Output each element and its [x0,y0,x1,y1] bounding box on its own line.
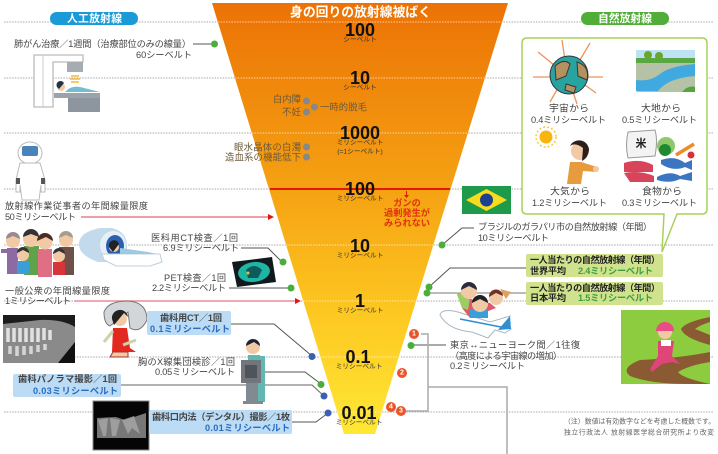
flight label [408,339,580,371]
caption: atmosphere [532,184,607,208]
footnote [564,416,715,436]
chest X-ray label [138,356,324,388]
PET exam label [152,272,294,293]
callout: cancer not observed: ガンの [393,197,421,208]
flight label: 0.2ミリシーベルト [450,361,525,371]
Japan average box: 日本平均 [530,292,566,303]
funnel title: 身の回りの放射線被ばく [290,4,431,20]
scale values [336,20,383,426]
dental CT label: 0.1ミリシーベルト [150,324,230,334]
Japan average box: 一人当たりの自然放射線（年間） [530,282,660,293]
panoramic label: 歯科パノラマ撮影／1回 [18,373,117,384]
icon: runner on path [621,310,710,384]
health effects in funnel: 不妊 [282,106,302,118]
Brazil natural radiation label [438,221,652,248]
scale values: 1000 [340,123,380,143]
intraoral dental label: 歯科口内法（デンタル）撮影／1枚 [152,411,290,422]
world average box: 一人当たりの自然放射線（年間） [530,254,660,265]
panoramic label [13,373,328,400]
icon: dental X-ray film [93,401,149,450]
scale values: 0.1 [345,347,371,367]
icon: radiotherapy machine [34,55,100,112]
Brazil natural radiation label: 10ミリシーベルト [478,233,549,243]
CT exam label: 医科用CT検査／1回 [151,232,238,243]
callout: cancer not observed [384,197,430,228]
health effects in funnel [225,94,367,162]
flight label: 東京↔ニューヨーク間／1往復 [450,339,580,350]
icon: family on airplane [440,282,511,338]
icon: protective suit worker [16,142,45,200]
caption: cosmic: 0.4ミリシーベルト [531,115,606,125]
scale values: 100 [345,20,375,40]
caption: ground: 大地から [641,102,681,114]
callout: cancer not observed: みられない [384,218,430,228]
world average box [426,254,663,290]
Brazil natural radiation label: ブラジルのガラパリ市の自然放射線（年間） [478,221,652,232]
worker dose limit: 50ミリシーベルト [5,212,76,222]
caption: food [622,184,697,208]
caption: ground [622,102,697,125]
panel: natural radiation sources [522,38,707,252]
health effects in funnel: 一時的脱毛 [320,102,367,112]
caption: ground: 0.5ミリシーベルト [622,115,697,125]
icon: food [624,130,694,182]
numbered markers and connector lines: 1 [412,330,416,338]
caption: atmosphere: 大気から [550,184,590,198]
CT exam label [151,232,286,266]
dental CT label: 歯科用CT／1回 [160,312,222,323]
intraoral dental label [149,410,332,434]
scale values: ミリシーベルト [337,138,383,146]
scale values: ミリシーベルト [337,306,383,314]
icon: dental panoramic X-ray [3,315,75,363]
public dose limit: 1ミリシーベルト [5,296,71,306]
scale values: ミリシーベルト [336,418,382,426]
world average box: 2.4ミリシーベルト [578,266,653,276]
callout: cancer not observed: 過剰発生が [384,207,430,218]
lung cancer treatment label: 肺がん治療／1週間（治療部位のみの線量） [14,38,191,49]
red threshold line 100 mSv: 100 [345,179,375,199]
lung cancer treatment label [14,38,218,60]
scale values: 10 [350,68,370,88]
caption: cosmic: 宇宙から [549,102,589,114]
health effects in funnel: 白内障 [273,94,301,104]
health effects in funnel: 造血系の機能低下 [225,152,301,162]
chest X-ray label: 0.05ミリシーベルト [155,367,235,377]
world average box: 世界平均 [530,265,566,276]
heading: natural radiation: 自然放射線 [598,11,652,25]
chest X-ray label: 胸のX線集団検診／1回 [138,356,235,367]
icon: family [1,229,74,277]
public dose limit: 一般公衆の年間線量限度 [5,285,110,296]
scale values: シーベルト [343,84,377,92]
icon: river landscape [636,50,695,92]
numbered markers and connector lines: 4 [389,404,393,410]
heading: artificial radiation [50,11,138,25]
icon: food: 米 [636,136,646,150]
footnote: （注）数値は有効数字などを考慮した概数です。 [564,416,715,426]
Japan average box [424,282,663,305]
worker dose limit [5,200,274,222]
caption: atmosphere: 1.2ミリシーベルト [532,198,607,208]
worker dose limit: 放射線作業従事者の年間線量限度 [5,200,148,211]
red threshold line 100 mSv [270,179,450,199]
public dose limit [5,285,301,306]
health effects in funnel: 眼水晶体の白濁 [234,142,301,152]
icon: man with X-ray panel [241,339,265,404]
caption: cosmic [531,102,606,125]
heading: natural radiation [581,11,669,25]
lung cancer treatment label: 60シーベルト [136,50,192,60]
scale values: ミリシーベルト [337,194,383,202]
footnote: 独立行政法人 放射線医学総合研究所より改変 [564,428,714,436]
dental CT label [147,311,316,360]
scale values: 0.01 [341,403,377,423]
caption: food: 0.3ミリシーベルト [622,198,697,208]
scale values: シーベルト [343,36,377,44]
scale values: ミリシーベルト [337,252,383,260]
intraoral dental label: 0.01ミリシーベルト [205,423,290,433]
icon: PET image [232,257,276,287]
scale values: 1 [355,291,365,311]
numbered markers and connector lines [386,329,507,454]
Japan average box: 1.5ミリシーベルト [578,293,653,303]
scale values: ミリシーベルト [336,362,382,370]
icon: Brazil flag [462,186,511,214]
icon: patient in dental CT [104,301,147,357]
PET exam label: PET検査／1回 [164,272,226,283]
scale values: (=1シーベルト) [337,148,383,156]
numbered markers and connector lines: 2 [400,370,404,376]
icon: earth with rays [533,40,603,104]
heading: artificial radiation: 人工放射線 [67,11,122,25]
flight label: （高度による宇宙線の増加） [450,350,562,361]
numbered markers and connector lines: 3 [399,408,403,414]
panoramic label: 0.03ミリシーベルト [33,386,118,396]
scale values: 10 [350,236,370,256]
caption: food: 食物から [642,184,682,198]
icon: CT scanner [79,228,162,266]
CT exam label: 6.9ミリシーベルト [163,243,239,253]
icon: sun and person [536,127,599,184]
PET exam label: 2.2ミリシーベルト [152,283,226,293]
